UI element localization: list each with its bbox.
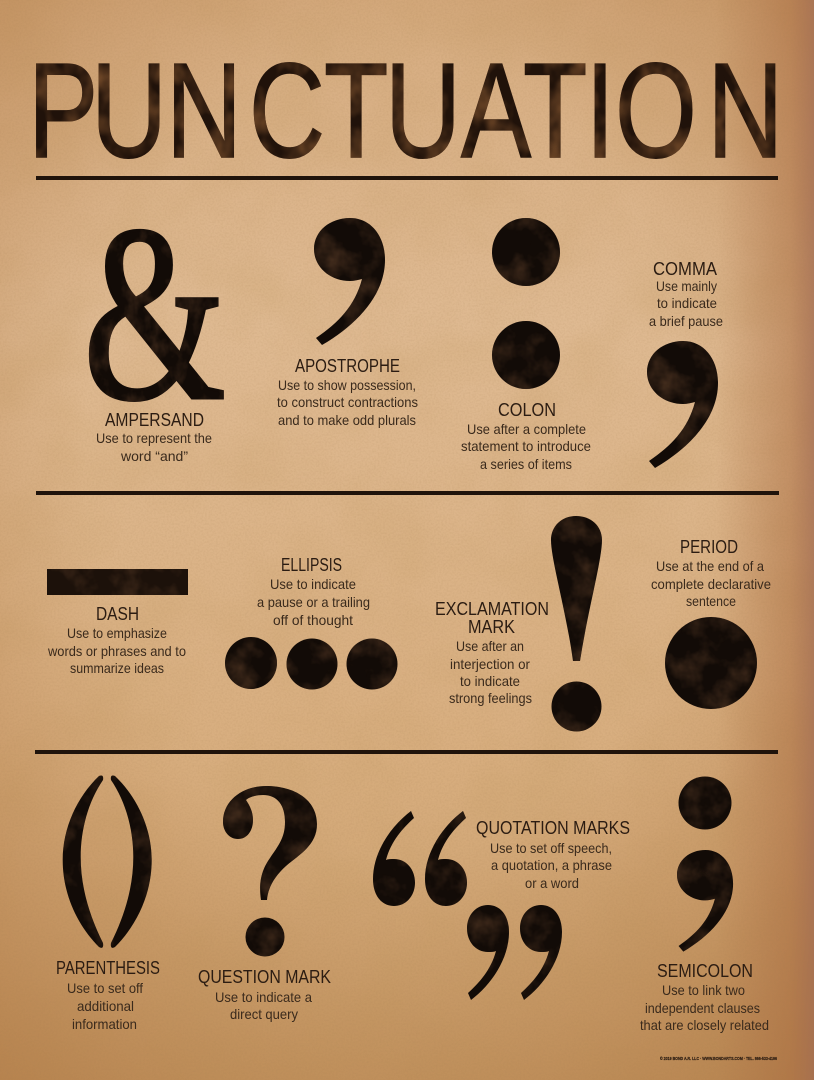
icon: parenthesis (63, 776, 152, 948)
panel: exclamation mark (435, 516, 602, 732)
panel: dash (47, 569, 188, 676)
description: dash: words or phrases and to (47, 643, 186, 659)
description: colon: statement to introduce (461, 438, 591, 454)
label: semicolon: SEMICOLON (657, 961, 753, 981)
icon: exclamation mark (551, 516, 602, 732)
description: semicolon: independent clauses (645, 1000, 760, 1016)
description: semicolon: Use to link two (662, 982, 745, 998)
description: question mark: direct query (230, 1006, 298, 1022)
panel: comma (647, 259, 723, 468)
panel: semicolon (640, 776, 769, 1033)
title: PUNCTUATION (28, 34, 783, 186)
panel: parenthesis (56, 776, 160, 1032)
description: ampersand: Use to represent the (96, 430, 212, 446)
description: dash (47, 625, 186, 676)
description: exclamation mark (449, 638, 532, 706)
panel: ampersand (83, 173, 226, 464)
label: comma: COMMA (653, 259, 717, 279)
label: parenthesis: PARENTHESIS (56, 958, 160, 978)
description: ellipsis: a pause or a trailing (257, 594, 370, 610)
description: semicolon: that are closely related (640, 1017, 769, 1033)
description: apostrophe: to construct contractions (277, 394, 418, 410)
divider (36, 491, 779, 495)
label: exclamation mark: EXCLAMATION (435, 599, 549, 619)
panel: quotation marks (373, 811, 630, 1000)
icon: dash (47, 569, 188, 595)
panel: ellipsis (225, 555, 398, 690)
divider (35, 750, 778, 754)
panel: colon (461, 218, 591, 472)
description: exclamation mark: to indicate (460, 673, 520, 689)
label: question mark: QUESTION MARK (198, 967, 331, 987)
label: period: PERIOD (680, 537, 738, 557)
description: parenthesis: information (72, 1016, 137, 1032)
description: period: sentence (686, 593, 736, 609)
description: parenthesis (67, 980, 143, 1032)
label: ampersand: AMPERSAND (105, 410, 204, 430)
description: exclamation mark: strong feelings (449, 690, 532, 706)
description: dash: Use to emphasize (67, 625, 167, 641)
description: colon (461, 421, 591, 472)
description: comma: to indicate (657, 295, 717, 311)
icon: ellipsis (225, 637, 398, 690)
label: apostrophe: APOSTROPHE (295, 356, 400, 376)
icon: ampersand: & (83, 173, 226, 453)
description: quotation marks: a quotation, a phrase (491, 857, 612, 873)
icon: quotation marks (373, 811, 562, 1000)
description: period: Use at the end of a (656, 558, 764, 574)
icon: comma (647, 341, 718, 468)
description: exclamation mark: interjection or (450, 656, 530, 672)
footer credit: © 2019 BOND A.R. LLC · WWW.BONDARTS.COM · TEL. 866-533-4196 (660, 1055, 777, 1061)
description: apostrophe: Use to show possession, (278, 377, 416, 393)
description: dash: summarize ideas (70, 660, 164, 676)
description: comma (649, 278, 723, 329)
description: colon: Use after a complete (467, 421, 586, 437)
description: quotation marks: Use to set off speech, (490, 840, 612, 856)
description: exclamation mark: Use after an (456, 638, 524, 654)
description: ellipsis (257, 576, 370, 628)
description: colon: a series of items (480, 456, 572, 472)
icon: semicolon (677, 776, 733, 952)
icon: colon (492, 218, 560, 389)
description: apostrophe (277, 377, 418, 428)
label: colon: COLON (498, 400, 556, 420)
description: ampersand (96, 430, 212, 464)
description: ellipsis: off of thought (273, 612, 353, 628)
icon: period (665, 617, 757, 709)
icon: apostrophe (314, 218, 385, 345)
description: question mark: Use to indicate a (215, 989, 312, 1005)
label: dash: DASH (96, 604, 139, 624)
description: period (651, 558, 771, 609)
description: quotation marks (490, 840, 612, 891)
label: quotation marks: QUOTATION MARKS (476, 818, 630, 838)
label: ellipsis: ELLIPSIS (281, 555, 342, 575)
panel: question mark (198, 786, 331, 1022)
description: comma: a brief pause (649, 313, 723, 329)
description: comma: Use mainly (656, 278, 717, 294)
description: ellipsis: Use to indicate (270, 576, 356, 592)
description: parenthesis: additional (77, 998, 134, 1014)
panel: period (651, 537, 771, 709)
icon: question mark (223, 786, 317, 956)
description: ampersand: word “and” (120, 448, 188, 464)
label: exclamation mark: MARK (468, 617, 515, 637)
label: exclamation mark (435, 599, 549, 637)
divider (36, 176, 778, 180)
description: quotation marks: or a word (525, 875, 579, 891)
description: period: complete declarative (651, 576, 771, 592)
description: apostrophe: and to make odd plurals (278, 412, 416, 428)
description: parenthesis: Use to set off (67, 980, 143, 996)
description: question mark (215, 989, 312, 1022)
panel: apostrophe (277, 218, 418, 428)
description: semicolon (640, 982, 769, 1033)
